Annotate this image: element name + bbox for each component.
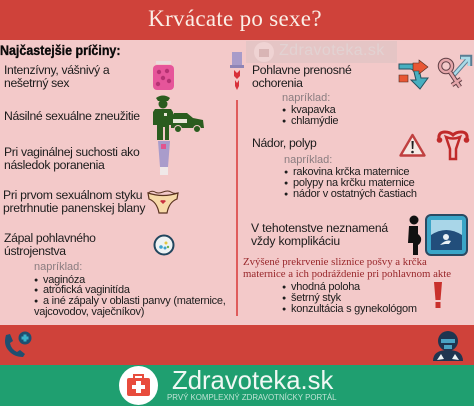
list: ●: [284, 180, 288, 186]
pregnancy advice list: šetrný styk: [291, 292, 341, 304]
list: vaginóza: [43, 274, 85, 286]
icon: petri dish: [154, 234, 174, 256]
title banner: [0, 0, 474, 40]
list: [284, 166, 417, 200]
tumor examples: [284, 154, 417, 200]
pregnancy advice list: konzultácia s gynekológom: [291, 303, 417, 315]
watermark: [246, 41, 397, 63]
cause: inflammation: Zápal pohlavného: [4, 231, 96, 245]
pregnancy advice list: ●: [282, 295, 286, 302]
list: ●: [284, 168, 288, 176]
cause: pregnancy: V tehotenstve neznamená: [251, 221, 388, 235]
icon: tube of cream: [158, 141, 170, 175]
list: ●: [282, 118, 286, 125]
cause: vaginal dryness: následok poranenia: [4, 158, 104, 172]
brand tagline: PRVÝ KOMPLEXNÝ ZDRAVOTNÍCKY PORTÁL: [167, 393, 337, 402]
cause: inflammation: [4, 231, 96, 258]
icon: exclamation mark: [434, 282, 442, 308]
list: ●: [34, 287, 38, 294]
icon: arrows: [398, 60, 429, 90]
list: atrofická vaginitída: [43, 284, 130, 296]
heading: most common causes: Najčastejšie príčiny:: [0, 42, 121, 58]
list: a iné zápaly v oblasti panvy (maternice,: [43, 295, 226, 307]
list: nádor v ostatných častiach: [293, 188, 417, 200]
list: rakovina krčka maternice: [293, 166, 409, 178]
list: polypy na krčku maternice: [293, 176, 415, 188]
cause: vaginal dryness: [4, 145, 140, 172]
list: [282, 104, 338, 127]
icon: ultrasound screen: [425, 214, 468, 256]
STD examples: [282, 92, 338, 127]
cause: sexual abuse: Násilné sexuálne zneužitie: [4, 109, 140, 123]
cause: first intercourse: [3, 188, 146, 215]
icon: pregnant woman: [408, 216, 422, 255]
green brand footer: [0, 365, 474, 406]
red footer band: [0, 325, 474, 365]
brand name: Zdravoteka.sk: [172, 367, 333, 395]
pregnancy note: maternice a ich podráždenie pri pohlavnom akte: [243, 268, 451, 280]
icon: first aid kit logo: [119, 366, 158, 405]
pregnancy advice list: ●: [282, 306, 286, 313]
pregnancy advice list: [282, 281, 417, 315]
label: for example: napríklad:: [282, 92, 330, 104]
cause: intense sex: [4, 63, 110, 90]
list: ●: [282, 107, 286, 114]
inflammation examples: [34, 261, 226, 318]
list: ●: [34, 298, 38, 305]
icon: phone with cross: [5, 332, 32, 357]
pregnancy note: Zvýšené prekrvenie sliznice pošvy a krčka: [243, 256, 427, 268]
cause: intense sex: nešetrný sex: [4, 76, 69, 90]
label: for example: napríklad:: [34, 261, 82, 273]
list: kvapavka: [291, 104, 335, 116]
cause: pregnancy: vždy komplikáciu: [251, 234, 340, 248]
cause: inflammation: ústrojenstva: [4, 244, 66, 258]
icon: underwear: [147, 190, 179, 214]
cause: first intercourse: Pri prvom sexuálnom styku: [3, 188, 142, 202]
watermark text: Zdravoteka.sk: [279, 42, 385, 59]
title: Krvácate po sexe?: [148, 6, 322, 31]
icon: uterus: [436, 130, 470, 160]
icon: jar of hearts: [153, 61, 174, 90]
cause: STDs: Pohlavne prenosné: [252, 63, 351, 77]
cause: STDs: ochorenia: [252, 76, 303, 90]
icon: gender symbols: [438, 54, 472, 88]
list: ●: [34, 276, 38, 284]
label: for example: napríklad:: [284, 154, 332, 166]
icon: warning triangle: [399, 134, 426, 157]
cause: pregnancy: [251, 221, 388, 248]
cause: intense sex: Intenzívny, vášnivý a: [4, 63, 109, 77]
cause: STDs: [252, 63, 352, 90]
icon: policeman and car: [153, 96, 204, 140]
cause: vaginal dryness: Pri vaginálnej suchosti ako: [4, 145, 139, 159]
cause: tumor, polyp: Nádor, polyp: [252, 136, 316, 150]
cause: first intercourse: pretrhnutie panenskej blany: [3, 201, 145, 215]
icon: pipette: [230, 52, 244, 90]
watermark logo: [254, 42, 274, 62]
list: chlamýdie: [291, 115, 338, 127]
pregnancy note: [243, 256, 451, 280]
icon: doctor: [433, 331, 463, 361]
pregnancy advice list: ●: [282, 284, 286, 291]
list: [34, 274, 226, 318]
list: ●: [284, 190, 288, 198]
pregnancy advice list: vhodná poloha: [291, 281, 360, 293]
center divider: [236, 100, 238, 316]
list: vajcovodov, vaječníkov): [34, 306, 144, 318]
